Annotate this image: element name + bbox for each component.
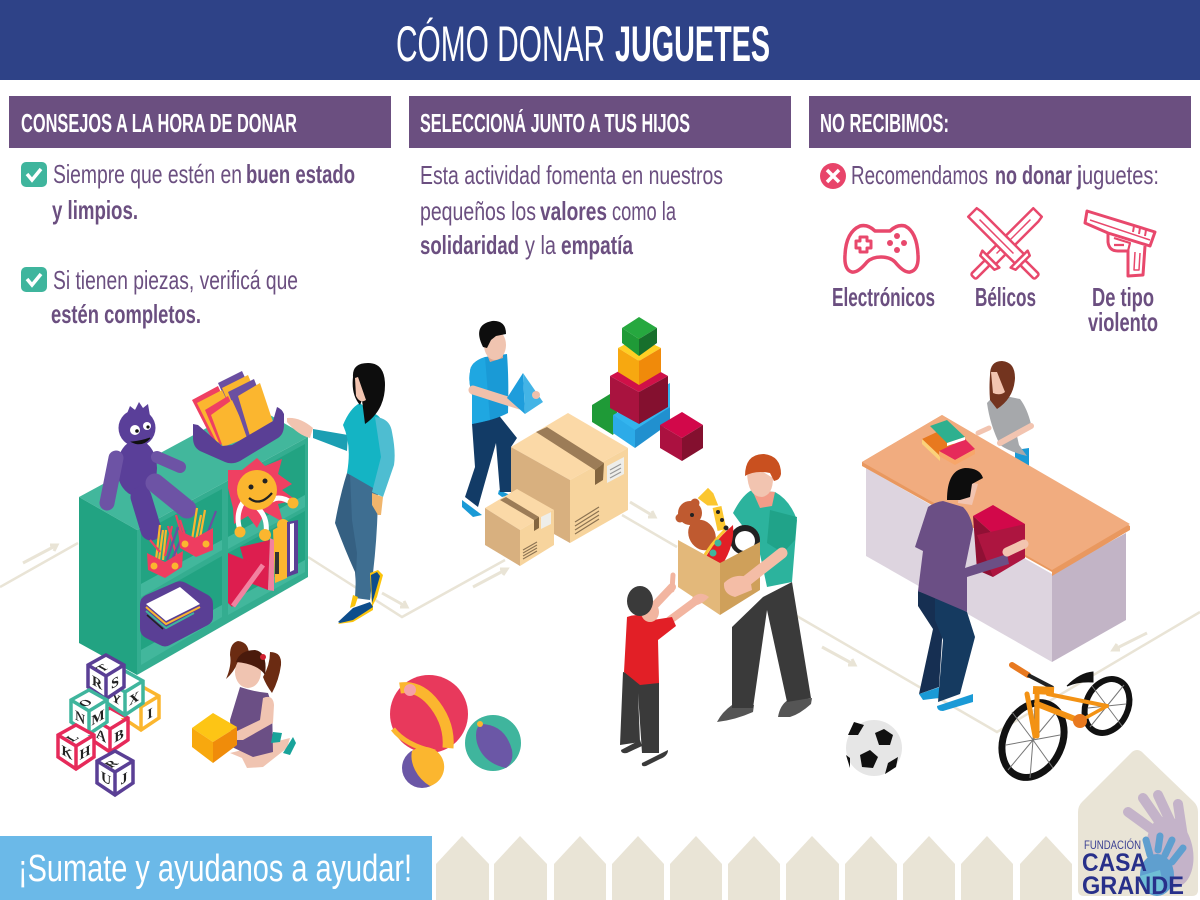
- alphabet blocks: [58, 655, 159, 795]
- block: yellow: I: [147, 705, 153, 723]
- logo: Fundación Casa Grande: GRANDE: [1082, 872, 1184, 900]
- icon: game controller: [845, 226, 918, 272]
- text block: activity: pequeños los: [420, 196, 536, 226]
- footer banner: ¡Sumate y ayudanos a ayudar!: [18, 848, 412, 890]
- paper tray: [140, 581, 213, 646]
- text block: activity: [420, 160, 723, 260]
- pencil cups: [147, 508, 216, 578]
- block: purple top: T: [93, 662, 113, 674]
- pyramid toy: [507, 373, 543, 414]
- text block: tip one: Siempre que estén en: [53, 159, 242, 189]
- bin with folders: [192, 371, 284, 463]
- block: purple bottom: [97, 751, 133, 795]
- icon: check two: [21, 267, 47, 292]
- panel: selecciona heading: [409, 96, 791, 148]
- plush monster: [107, 402, 187, 530]
- icon: gun: [1085, 211, 1155, 276]
- small box: [485, 489, 554, 566]
- bicycle: [990, 665, 1138, 788]
- panel: consejos heading: CONSEJOS A LA HORA DE DONAR: [21, 108, 297, 138]
- figure: boy with pyramid: [462, 321, 543, 517]
- icon: check one: [21, 162, 47, 187]
- text block: activity: empatía: [561, 230, 633, 260]
- logo: Fundación Casa Grande: [1078, 750, 1199, 900]
- stacked color blocks: [592, 317, 703, 461]
- text block: activity: Esta actividad fomenta en nuestros: [420, 160, 723, 190]
- block: purple top: [88, 655, 124, 699]
- figure: woman at shelf: [287, 363, 395, 624]
- balls group: [390, 675, 521, 788]
- text block: tip two: [21, 265, 298, 329]
- block: teal front: N: [75, 708, 85, 729]
- block: pink left: L: [63, 732, 83, 744]
- stack of books on desk: [922, 420, 975, 465]
- text block: tip one: buen estado: [246, 159, 355, 189]
- donation box: [678, 540, 760, 615]
- text block: activity: y la: [525, 230, 556, 260]
- block: purple top: R: [92, 673, 103, 694]
- block: purple bottom: J: [120, 770, 128, 789]
- icon labels: violento: [1088, 307, 1158, 337]
- icon labels: De tipo: [1092, 282, 1154, 312]
- sun toy: [228, 458, 298, 541]
- block: teal back: X: [129, 689, 139, 710]
- figure: man with donation box: [676, 454, 812, 722]
- block: pink middle: A: [96, 726, 106, 747]
- toys in box: [676, 490, 760, 565]
- title: CÓMO DONAR: [396, 16, 605, 72]
- figure: child in red: [620, 575, 709, 766]
- text block: recommendation: uguetes:: [1082, 160, 1159, 190]
- teal ball: [465, 715, 521, 771]
- cardboard boxes: [485, 413, 628, 566]
- figure: man with red box: [915, 468, 1025, 711]
- text block: activity: solidaridad: [420, 230, 519, 260]
- icon labels: Bélicos: [975, 282, 1036, 312]
- text block: tip two: Si tienen piezas, verificá que: [53, 265, 298, 295]
- block: pink middle: B: [114, 726, 124, 746]
- block: purple bottom: R: [101, 758, 122, 770]
- figure: woman behind desk: [978, 361, 1031, 466]
- floor path lines and arrows: [0, 502, 1200, 732]
- logo: Fundación Casa Grande: CASA: [1082, 849, 1147, 877]
- header bar: [0, 0, 1200, 80]
- red box: [973, 505, 1025, 577]
- row of house shapes: [436, 836, 1072, 900]
- block: purple bottom: U: [101, 769, 111, 790]
- yellow block: [192, 713, 237, 763]
- small ball: [402, 747, 444, 788]
- block: pink middle: [92, 708, 128, 752]
- icon labels: [832, 282, 1158, 337]
- block: teal front: [71, 690, 107, 734]
- text block: tip two: estén completos.: [51, 299, 201, 329]
- desk: [862, 415, 1130, 662]
- books on shelf: [228, 520, 298, 607]
- text block: tip one: [21, 159, 355, 225]
- text block: activity: valores: [540, 196, 607, 226]
- block: pink left: H: [80, 743, 91, 764]
- bookshelf: [79, 404, 308, 675]
- soccer ball: [846, 720, 902, 776]
- icon labels: Electrónicos: [832, 282, 935, 312]
- red ball: [390, 675, 468, 753]
- figure: girl with block: [192, 641, 296, 768]
- panel: no recibimos heading: NO RECIBIMOS:: [820, 108, 949, 138]
- logo: Fundación Casa Grande: FUNDACIÓN: [1084, 837, 1141, 852]
- block: teal front: O: [75, 697, 96, 709]
- text block: tip one: y limpios.: [52, 195, 138, 225]
- block: teal front: M: [91, 707, 105, 730]
- logo hands: [1128, 795, 1199, 896]
- panel: consejos heading: [9, 96, 391, 148]
- footer banner: [0, 836, 432, 900]
- block: pink left: [58, 725, 94, 769]
- icon: crossed swords: [964, 204, 1046, 285]
- icon: cross: [820, 163, 846, 189]
- text block: recommendation: no donar j: [995, 160, 1082, 190]
- block: pink left: K: [62, 743, 73, 764]
- text block: recommendation: [820, 160, 1159, 190]
- text block: recommendation: Recomendamos: [851, 160, 988, 190]
- block: purple top: S: [111, 674, 119, 693]
- title: JUGUETES: [615, 16, 770, 72]
- panel: no recibimos heading: [809, 96, 1191, 148]
- block: teal back: [107, 671, 143, 715]
- big box: [511, 413, 628, 543]
- panel: selecciona heading: SELECCIONÁ JUNTO A TUS HIJOS: [420, 108, 690, 138]
- block: teal back: Y: [111, 689, 121, 710]
- text block: activity: como la: [612, 196, 676, 226]
